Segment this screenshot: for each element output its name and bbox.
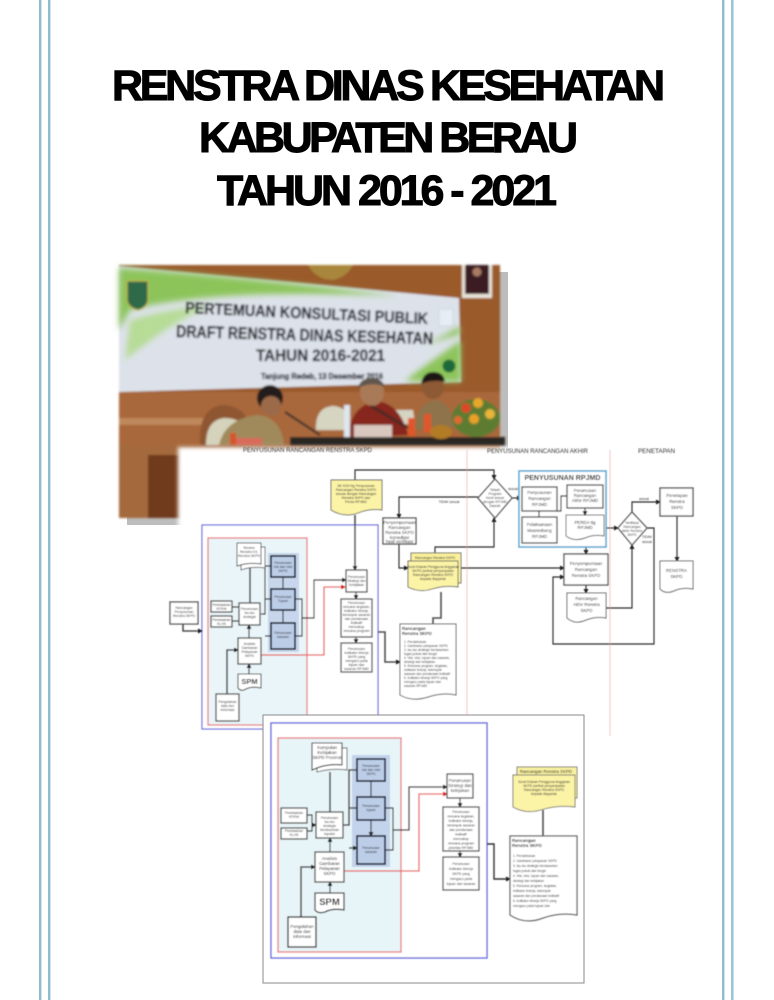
person right (414, 372, 454, 430)
doc: rancangan renstra list: indikator kinerja, kelompok (404, 668, 442, 672)
doc: rancangan renstra list: 1. Pendahuluan (404, 640, 427, 644)
box: penelaahan KLHS (281, 828, 307, 839)
box: isu strategis (239, 603, 260, 625)
box: rencana program: dan pendanaan (449, 828, 473, 832)
box: musrenbang: RPJMD (532, 534, 547, 539)
decision diamond: verifikasi: Program (488, 492, 502, 496)
doc: perda RPJMD: RPJMD (577, 525, 593, 530)
doc: rancangan akhir renstra: SKPD (581, 608, 592, 613)
box: rencana program: mencakup (453, 837, 469, 841)
doc: rancangan renstra list: sasaran dan pendanaan indikatif (404, 672, 450, 676)
decision diamond: verifikasi (478, 479, 512, 518)
box: perumusan indikator: SKPD yang (348, 655, 365, 659)
red boundary (278, 738, 401, 952)
box: isu strategis (316, 812, 343, 838)
box: strategi: Strategi dan (448, 783, 472, 788)
box: strategi (447, 774, 473, 798)
tujuan sasaran panel (352, 755, 390, 867)
box: strategi: Perumusan (449, 778, 472, 783)
title: RENSTRA DINAS KESEHATAN (112, 62, 665, 110)
box: perumusan tujuan: Perumusan (274, 595, 292, 599)
box: visi misi: SKPD (366, 772, 376, 776)
box: pengolahan data: informasi (293, 934, 311, 939)
box: penyempurnaan: konsultasi (390, 535, 409, 540)
doc: rancangan renstra list: 2. Gambaran pelayanan SKPD (513, 859, 557, 863)
red boundary (208, 538, 307, 725)
box: penyempurnaan rancangan (564, 554, 608, 585)
box: penyempurnaan: Penyempurnaan (383, 520, 416, 525)
box: perumusan sasaran: sasaran (277, 635, 289, 639)
doc: renstra SKPD (660, 561, 693, 592)
doc stack: review: Kumpulan (317, 745, 337, 750)
doc stack: rancangan renstra yellow (513, 767, 577, 812)
doc: renstra SKPD: RENSTRA (666, 568, 687, 573)
decision diamond: verifikasi akhir: Rancangan (623, 525, 641, 529)
doc stack: review: Review (243, 546, 255, 550)
box: penelaahan RTRW: RTRW (289, 815, 300, 819)
connector lines (301, 770, 543, 917)
doc stack: review: Renstra K/L (240, 550, 258, 554)
decision diamond: verifikasi akhir: Akhir Renstra (622, 529, 642, 533)
box: analisis gambaran (238, 638, 261, 664)
decision diamond: verifikasi: Daerah (489, 504, 501, 508)
doc: rancangan renstra list: strategi dan kebijakan (513, 879, 544, 883)
box: perumusan strategi (346, 570, 367, 592)
label: tidak sesuai akhir: sesuai (642, 540, 652, 544)
doc stack: rancangan renstra yellow: Surat Edaran Pengguna Anggaran (518, 780, 570, 784)
box: rencana program: kelompok sasaran (447, 824, 475, 828)
box: perumusan strategi: Kebijakan (349, 583, 364, 587)
box: penelaahan KLHS: KLHS (290, 833, 299, 837)
doc: keputusan yellow: Perda RPJMD (345, 500, 367, 504)
box: pengolahan data (216, 694, 239, 721)
box: pengolahan data: informasi (221, 708, 235, 712)
box: penyempurnaan: Rancangan (388, 525, 411, 530)
person left (219, 385, 284, 445)
doc: rancangan renstra yellow stack: Rancangan Renstra SKPD (413, 573, 454, 577)
chairs (200, 405, 415, 445)
label: tidak sesuai: TIDAK sesuai (439, 500, 460, 504)
box: perumusan tujuan: Tujuan (278, 599, 288, 603)
box: penelaahan RTRW: Penelaahan (285, 811, 303, 815)
page border: left double rule (39, 0, 50, 1000)
box: rancangan input left: Renstra SKPD (173, 614, 196, 618)
tujuan sasaran panel (268, 553, 299, 652)
box: rancangan input left: Rancangan (175, 606, 193, 610)
box: indikator: mengacu pada (450, 877, 472, 881)
box: penelaahan KLHS: Penelaahan (212, 618, 231, 622)
box: penyempurnaan rancangan: Rancangan (575, 567, 598, 572)
box: rancangan input left (170, 602, 198, 624)
doc: rancangan renstra yellow stack: SKPD perihal penyampaian (412, 569, 454, 573)
doc: keputusan yellow: Renstra SKPD dan (342, 496, 370, 500)
box: rancangan akhir RPJMD (567, 485, 603, 508)
box: analisis gambaran: Pelayanan (319, 866, 340, 871)
box: analisis gambaran: Pelayanan (241, 650, 258, 654)
banner small logo (439, 309, 453, 326)
flowchart 1: Renstra process (170, 447, 693, 736)
box: visi misi (357, 759, 385, 781)
box: penyempurnaan rancangan: Renstra SKPD (572, 573, 600, 578)
box: rancangan akhir RPJMD: Akhir RPJMD (572, 498, 598, 503)
box: indikator: Perumusan (452, 862, 470, 866)
doc: keputusan yellow: sesuai dengan Rancangan (336, 492, 376, 496)
garuda ornament (308, 265, 353, 280)
box: rencana program: rencana program (448, 842, 474, 846)
box: penyempurnaan: Renstra SKPD (385, 530, 414, 535)
box: indikator: Indikator kinerja (449, 867, 473, 871)
title (112, 62, 665, 215)
box: rencana program: Perumusan (452, 810, 470, 814)
box: rencana program: prioritas RPJMD (449, 846, 474, 850)
banner emblem (127, 281, 148, 310)
doc: rancangan renstra list: 3. Isu-isu strategis berdasarkan (513, 864, 558, 868)
box: sasaran: Perumusan (362, 846, 380, 850)
decision diamond: verifikasi: Telaah (490, 488, 500, 492)
doc stack: rancangan renstra yellow: SKPD perihal penyampaian (523, 784, 565, 788)
box: perumusan indikator: Perumusan (348, 647, 365, 651)
doc stack: review (237, 543, 265, 570)
phase heading: penetapan: PENETAPAN (638, 448, 675, 455)
box: isu strategis: tupoksi (324, 832, 335, 836)
box: musrenbang: Pelaksanaan (527, 522, 553, 527)
doc: rancangan akhir renstra (567, 593, 606, 622)
doc: rancangan renstra list: 5. Rencana program, kegiatan, (513, 884, 557, 888)
doc stack: review: SKPD Provinsi (313, 755, 341, 760)
doc: rancangan renstra list: sasaran RPJMD (404, 684, 428, 688)
page border: right double rule (722, 0, 734, 1000)
doc: rancangan renstra list: indikator kinerja, kelompok (513, 889, 551, 893)
doc: SPM: SPM (241, 677, 258, 686)
box: analisis gambaran: Gambaran (319, 861, 340, 866)
box: isu strategis: Isu-isu (244, 611, 255, 615)
box: perumusan rencana: dan pendanaan (345, 617, 368, 621)
banner text (176, 300, 433, 381)
box: perumusan rencana: rencana kegiatan, (343, 605, 370, 609)
doc: SPM (315, 893, 344, 913)
flower arrangement (452, 398, 500, 437)
box: perumusan visi misi (271, 556, 295, 577)
box: pengolahan data: Pengolahan (290, 924, 314, 929)
box: penelaahan KLHS: Penelaahan (285, 829, 303, 833)
box: penyempurnaan: hasil verifikasi (386, 539, 413, 544)
box: rencana program: indikator kinerja, (449, 819, 473, 823)
box: penelaahan RTRW (281, 808, 307, 823)
flowchart 2: detail of Renstra drafting (271, 723, 577, 958)
doc stack: review (312, 743, 347, 772)
doc: rancangan renstra yellow stack: kepada Bappeda (420, 577, 446, 581)
box: indikator (443, 857, 479, 890)
box: isu strategis: Perumusan (241, 607, 258, 611)
box: rancangan input left: Penyusunan (175, 610, 194, 614)
box: analisis gambaran (315, 852, 344, 882)
box: perumusan rencana: rencana program (344, 629, 370, 633)
box: penyempurnaan rancangan: Penyempurnaan (570, 561, 603, 566)
box: rencana program (443, 807, 479, 851)
decision diamond: verifikasi: Kecil sesuai (486, 496, 504, 500)
doc: rancangan renstra list: 4. Visi, misi, tujuan dan sasaran, (404, 656, 450, 660)
box: perumusan rencana: kelompok sasaran (343, 613, 370, 617)
phase heading: rancangan renstra: PENYUSUNAN RANCANGAN RENSTRA SKPD (243, 447, 372, 454)
box: penetapan renstra: Renstra (669, 499, 685, 504)
connector lines (183, 470, 677, 694)
wood wall lower panel (119, 392, 500, 445)
doc: rancangan renstra list: mengacu pada tujuan dan (513, 904, 550, 908)
box: analisis gambaran: Gambaran (241, 646, 258, 650)
doc: rancangan renstra list: 3. Isu-isu strategis berdasarkan (404, 648, 449, 652)
doc: rancangan renstra list: Rancangan (402, 626, 426, 631)
box: isu strategis: Isu-isu (324, 820, 335, 824)
doc: keputusan yellow (331, 480, 382, 515)
doc: rancangan renstra list: strategi dan kebijakan (404, 660, 435, 664)
doc: rancangan renstra list: Rancangan (512, 838, 536, 843)
box: musrenbang (522, 517, 557, 543)
box: rancangan RPJMD (522, 487, 557, 511)
box: rencana program: rencana kegiatan, (448, 814, 475, 818)
doc: rancangan renstra list: 1. Pendahuluan (513, 854, 536, 858)
doc stack: rancangan renstra yellow: kepada Bappeda (531, 792, 557, 796)
doc: rancangan renstra list (400, 624, 456, 699)
photo shadow (127, 272, 508, 525)
phase dividers (467, 450, 610, 736)
doc: rancangan akhir renstra: Rancangan (575, 596, 598, 601)
box: tujuan: tujuan (366, 808, 376, 812)
doc: rancangan renstra yellow stack: Rancangan Renstra SKPD (415, 556, 456, 560)
decision diamond: verifikasi akhir (618, 512, 647, 545)
doc stack: rancangan renstra yellow: Rancangan Renstra SKPD (520, 769, 572, 774)
doc: rancangan renstra list: 4. Visi, misi, tujuan dan sasaran, (513, 874, 559, 878)
heading: penyusunan RPJMD: PENYUSUNAN RPJMD (524, 475, 600, 482)
box: perumusan visi misi: Perumusan (274, 561, 292, 565)
box: perumusan strategi: Strategi dan (347, 579, 366, 583)
box: perumusan visi misi: visi dan misi (274, 565, 292, 569)
box: isu strategis: strategis (243, 615, 256, 619)
box: penelaahan KLHS: KLHS (217, 622, 227, 626)
box: penelaahan RTRW: RTRW (216, 607, 227, 611)
doc: renstra SKPD: SKPD (671, 574, 682, 579)
health logo (442, 360, 456, 372)
box: rancangan akhir RPJMD: Rancangan (574, 493, 597, 498)
box: rencana program: indikatif (455, 832, 467, 836)
label: sesuai akhir: sesuai (639, 497, 649, 501)
doc: rancangan renstra yellow stack: Surat Edaran Pengguna Anggaran (407, 565, 459, 569)
box: perumusan visi misi: SKPD (278, 569, 288, 573)
box: perumusan tujuan (271, 589, 295, 610)
box: strategi: kebijakan (451, 788, 470, 793)
box: perumusan rencana: mencakup (349, 625, 364, 629)
box: isu strategis: Perumusan (321, 816, 338, 820)
doc: rancangan renstra list: 2. Gambaran pelayanan SKPD (404, 644, 448, 648)
box: perumusan indikator: sasaran RPJMD (344, 667, 369, 671)
banner text: DRAFT RENSTRA DINAS KESEHATAN (176, 322, 433, 348)
decision diamond: verifikasi akhir: Verifikasi (625, 521, 639, 525)
box: penelaahan RTRW: Penelaahan (212, 603, 231, 607)
box: perumusan rencana: indikatif (351, 621, 362, 625)
doc: rancangan renstra list: tugas pokok dan fungsi (404, 652, 437, 656)
box: rancangan akhir RPJMD: Perumusan (574, 488, 597, 493)
banner text: Tanjung Redeb, 13 Desember 2016 (261, 371, 383, 381)
doc: rancangan renstra list: Renstra SKPD (512, 843, 542, 848)
banner text: TAHUN 2016-2021 (256, 347, 385, 365)
RPJMD internal arrows (539, 496, 585, 517)
box: tujuan: Perumusan (362, 804, 380, 808)
box: perumusan rencana (341, 599, 372, 637)
box: perumusan indikator (341, 643, 372, 672)
flowchart 1 white panel (178, 447, 706, 739)
box: tujuan (357, 797, 385, 820)
doc: keputusan yellow: SK KDH ttg Penyusunan (337, 484, 375, 488)
doc stack: review: Renstra SKPD (238, 554, 261, 558)
box: perumusan indikator: tujuan dan (349, 663, 365, 667)
label: sesuai: sesuai (508, 487, 518, 491)
blue boundary (271, 723, 487, 958)
decision diamond: verifikasi akhir: SKPD (627, 533, 637, 537)
doc stack: rancangan renstra yellow: Rancangan Renstra SKPD (524, 788, 565, 792)
doc: rancangan renstra list: 6. Indikator kinerja SKPD yang (513, 899, 557, 903)
decision diamond: verifikasi: dengan RPJMD (483, 500, 508, 504)
box: analisis gambaran: SKPD (324, 871, 335, 876)
box: perumusan rencana: indikator kinerja, (344, 609, 369, 613)
box: musrenbang: Musrenbang (527, 528, 552, 533)
doc stack: review: Kebijakan (317, 750, 337, 755)
box: perumusan strategi: Perumusan (348, 575, 365, 579)
box: visi misi: visi dan misi (362, 768, 380, 772)
doc: keputusan yellow: Rancangan Renstra SKPD (336, 488, 377, 492)
box: visi misi: Perumusan (362, 764, 380, 768)
box: penetapan renstra: SKPD (671, 505, 683, 510)
box: pengolahan data: Pengolahan (218, 700, 237, 704)
box: penyempurnaan (383, 518, 416, 544)
box: analisis gambaran: Analisis (322, 856, 338, 861)
doc: rancangan renstra list: 5. Rencana program, kegiatan, (404, 664, 448, 668)
box: penetapan renstra (660, 488, 693, 516)
box: sasaran (357, 836, 385, 864)
doc: rancangan renstra list (510, 836, 577, 921)
box: penelaahan RTRW (211, 601, 232, 612)
doc: rancangan renstra list: mengacu pada tujuan dan (404, 680, 441, 684)
box: perumusan indikator: Indikator kinerja (345, 651, 369, 655)
box: analisis gambaran: SKPD (245, 654, 255, 658)
doc: rancangan renstra list: Renstra SKPD (402, 631, 432, 636)
box: penetapan renstra: Penetapan (666, 493, 688, 498)
box: sasaran: sasaran (365, 850, 377, 854)
box: penelaahan KLHS (211, 616, 232, 627)
box: isu strategis: strategis (323, 824, 336, 828)
title: TAHUN 2016 - 2021 (217, 167, 557, 215)
title: KABUPATEN BERAU (199, 114, 578, 162)
panel: penyusunan RPJMD (519, 471, 606, 547)
box: rancangan RPJMD: RPJMD (532, 502, 547, 507)
box: perumusan sasaran (271, 623, 295, 649)
doc: rancangan akhir renstra: Akhir Renstra (573, 602, 600, 607)
label: tidak sesuai akhir: TIDAK (642, 535, 653, 539)
person centre (348, 378, 408, 441)
banner (119, 266, 461, 392)
box: perumusan indikator: mengacu pada (345, 659, 368, 663)
box: indikator: SKPD yang (452, 872, 470, 876)
box: pengolahan data: data dan (221, 704, 234, 708)
flowchart 2 frame: enlarged detail (263, 715, 584, 983)
blue boundary (202, 525, 378, 729)
box: indikator: tujuan dan sasaran (447, 882, 476, 886)
photo: public consultation meeting (119, 265, 505, 518)
doc: rancangan renstra list: sasaran dan pendanaan indikatif (513, 894, 559, 898)
box: rancangan RPJMD: Penyusunan (527, 490, 552, 495)
box: analisis gambaran: Analisis (244, 642, 256, 646)
doc: SPM (238, 674, 261, 690)
doc: rancangan renstra list: tugas pokok dan fungsi (513, 869, 546, 873)
box: rancangan RPJMD: Rancangan (528, 496, 551, 501)
box: pengolahan data: data dan (293, 929, 311, 934)
doc: perda RPJMD (566, 515, 604, 540)
banner text: PERTEMUAN KONSULTASI PUBLIK (185, 300, 429, 328)
box: perumusan rencana: Perumusan (348, 601, 365, 605)
doc: perda RPJMD: PERDA ttg (574, 520, 596, 525)
doc: SPM: SPM (319, 897, 340, 908)
doc: rancangan renstra list: 6. Indikator kinerja SKPD yang (404, 676, 448, 680)
box: isu strategis: berdasarkan (320, 828, 339, 832)
doc: rancangan renstra yellow stack (407, 553, 461, 591)
phase heading: rancangan akhir: PENYUSUNAN RANCANGAN AKHIR (487, 448, 588, 455)
portrait frame (462, 265, 492, 298)
table items (230, 405, 505, 446)
box: pengolahan data (288, 917, 316, 947)
box: perumusan sasaran: Perumusan (274, 631, 292, 635)
banner green swooshes (119, 268, 461, 382)
